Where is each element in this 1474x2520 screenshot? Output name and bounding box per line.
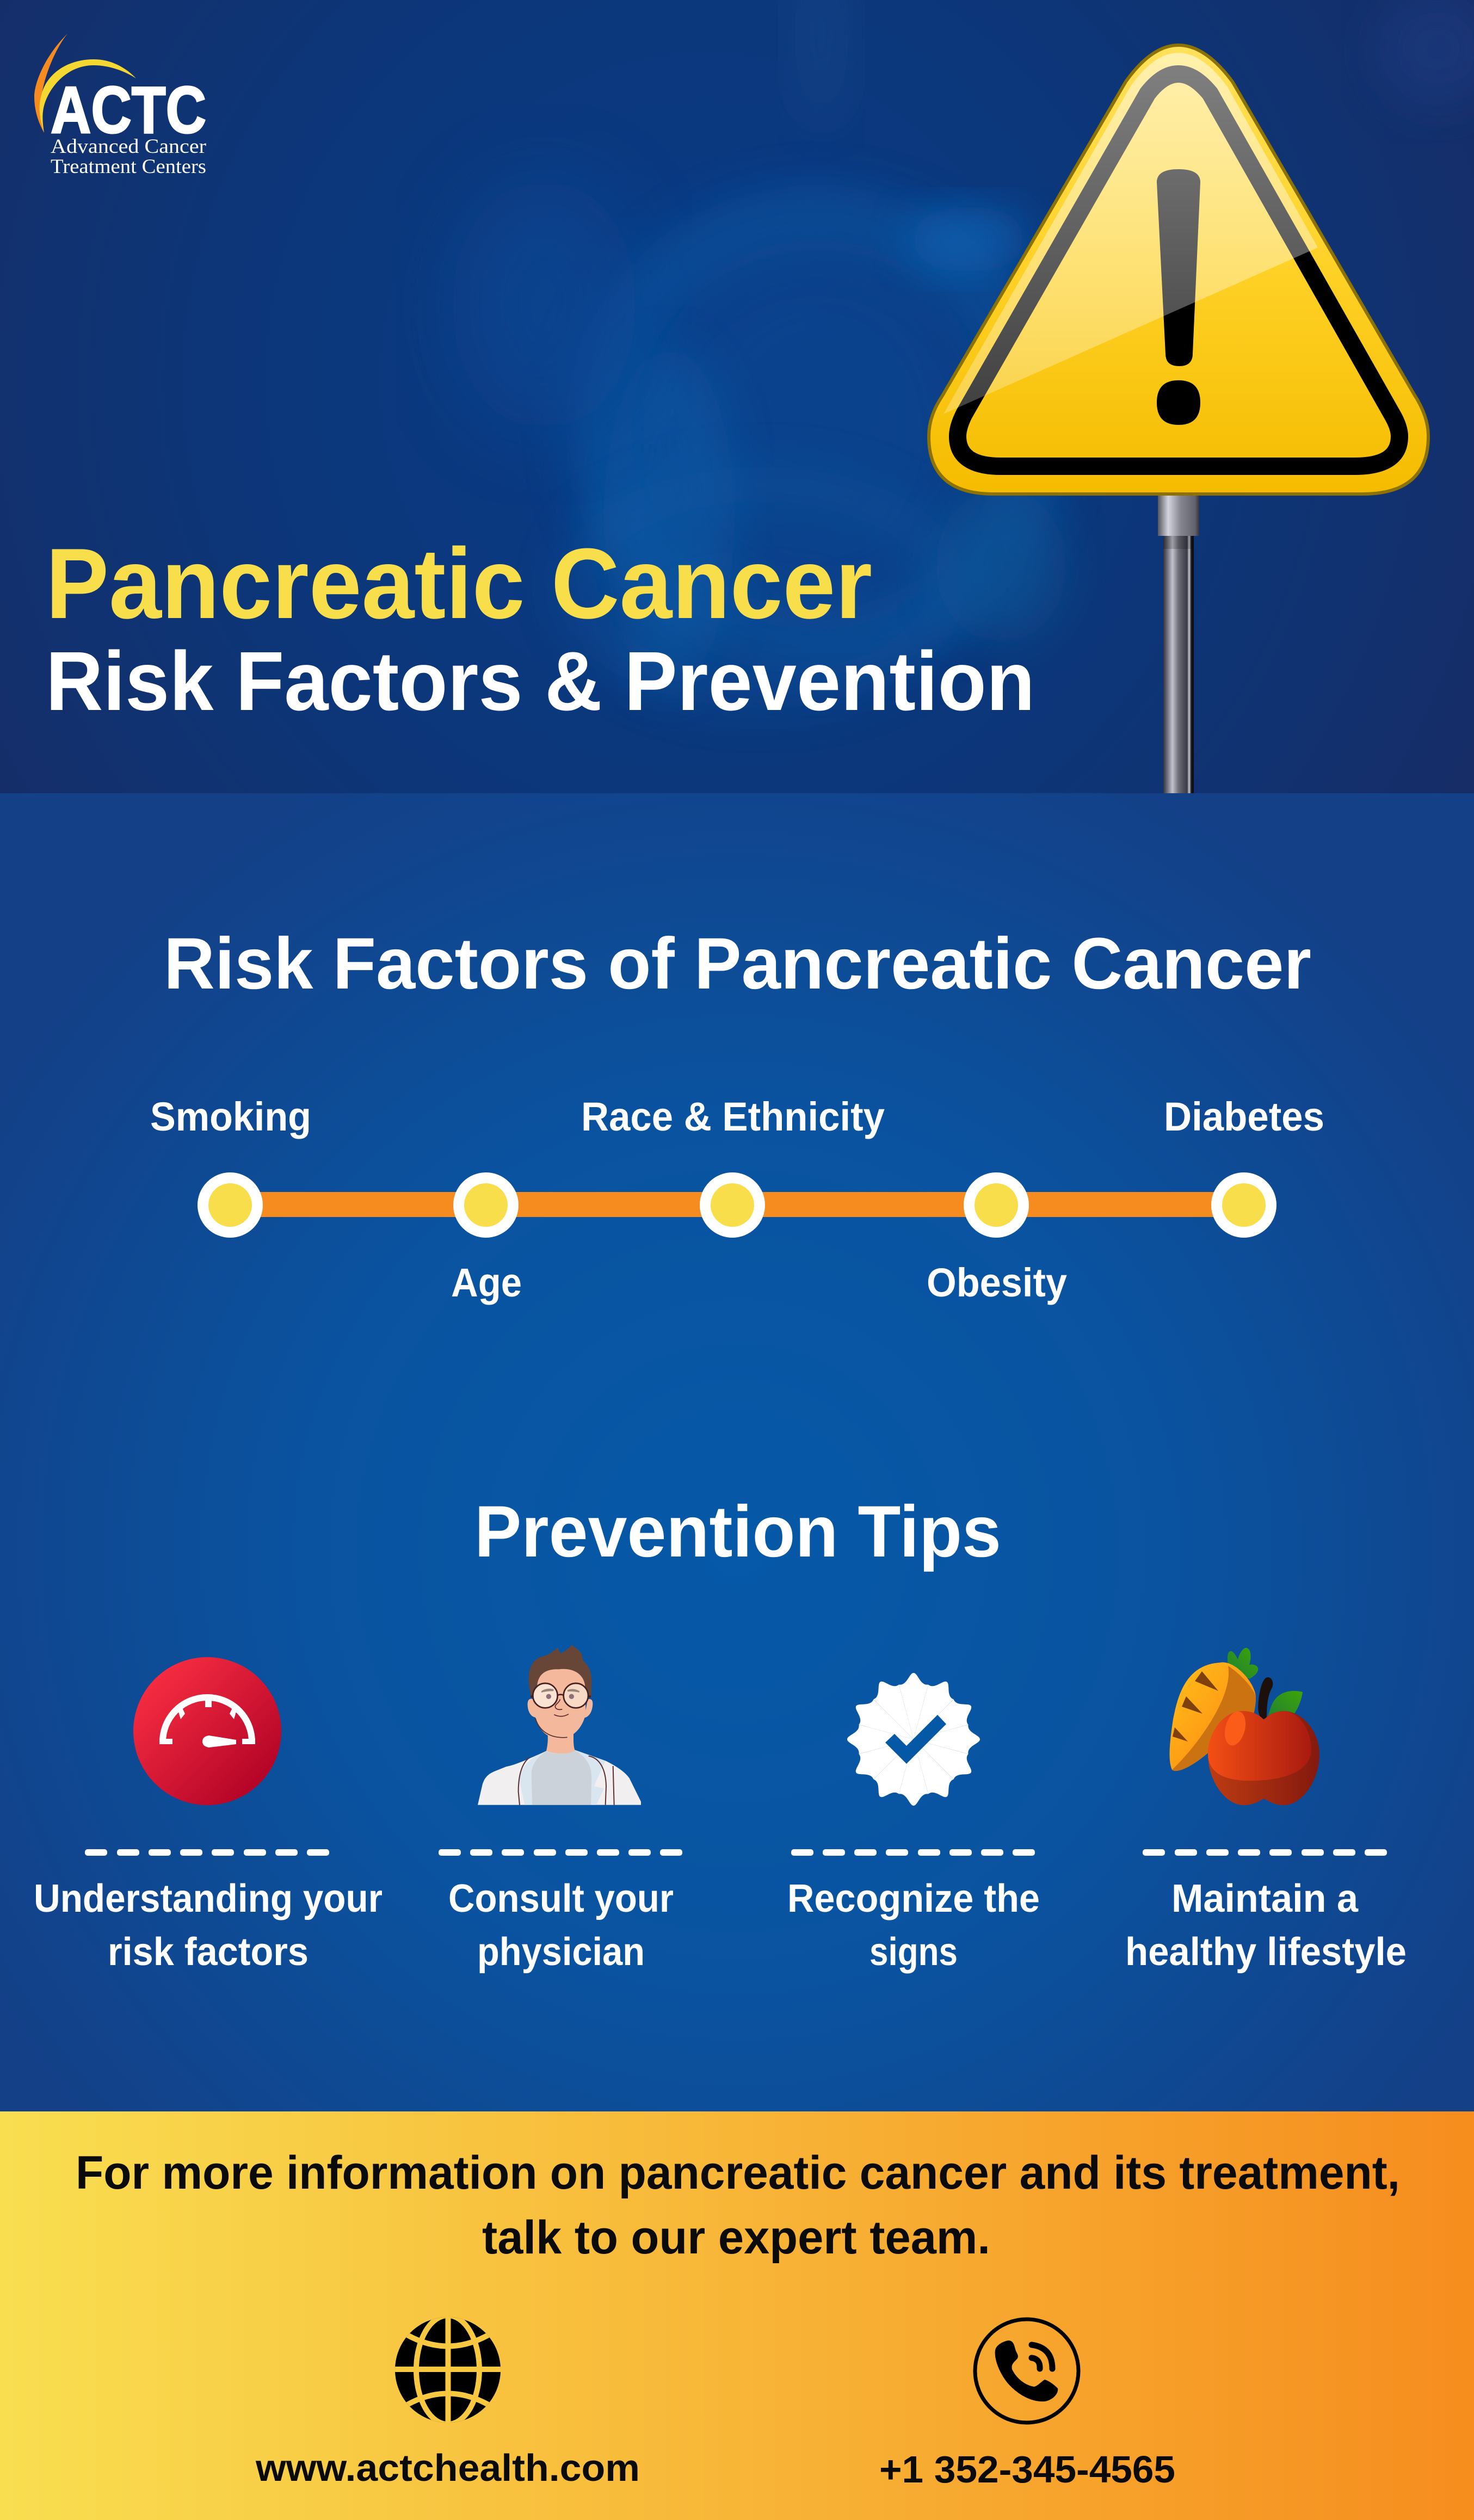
icon: warning triangle bbox=[929, 45, 1428, 494]
footer message bbox=[76, 2147, 1400, 2264]
node: race and ethnicity bbox=[581, 1094, 885, 1232]
tip label: Maintain a bbox=[1171, 1877, 1359, 1920]
tip label: Understanding your bbox=[34, 1877, 383, 1920]
panel: header bbox=[0, 0, 1474, 793]
icon: warning sign post bbox=[1158, 494, 1199, 793]
icon: verified badge bbox=[847, 1673, 980, 1806]
icon: globe bbox=[395, 2317, 501, 2423]
divider dashes bbox=[85, 1849, 329, 1856]
icon: logo swoosh bbox=[34, 34, 136, 133]
footer message: talk to our expert team. bbox=[482, 2212, 990, 2264]
tip: consult your physician bbox=[439, 1645, 682, 1974]
tip label: physician bbox=[477, 1930, 645, 1974]
tip label: healthy lifestyle bbox=[1125, 1930, 1407, 1974]
heading: prevention tips: Prevention Tips bbox=[474, 1491, 1001, 1572]
contact: website: www.actchealth.com bbox=[255, 2447, 640, 2489]
title: Pancreatic Cancer bbox=[46, 527, 872, 639]
logo wordmark: ACTC bbox=[51, 73, 206, 147]
logo subtitle: Treatment Centers bbox=[51, 156, 206, 178]
tip label: Consult your bbox=[448, 1877, 674, 1920]
node: age: Age bbox=[451, 1260, 522, 1305]
icon: phone bbox=[975, 2319, 1078, 2423]
icon: gauge bbox=[133, 1657, 281, 1805]
divider dashes bbox=[791, 1849, 1035, 1856]
tip: maintain a healthy lifestyle bbox=[1125, 1648, 1407, 1974]
tip label: risk factors bbox=[108, 1930, 309, 1974]
node: age bbox=[451, 1178, 522, 1305]
divider dashes bbox=[439, 1849, 682, 1856]
tip label bbox=[34, 1877, 383, 1974]
node: obesity bbox=[927, 1178, 1067, 1305]
tip: understanding your risk factors bbox=[34, 1657, 383, 1974]
node: diabetes: Diabetes bbox=[1164, 1094, 1324, 1139]
tip: recognize the signs bbox=[787, 1673, 1040, 1974]
logo: ACTC bbox=[34, 34, 206, 178]
title: Risk Factors & Prevention bbox=[46, 634, 1035, 728]
footer message: For more information on pancreatic cancer and its treatment, bbox=[76, 2147, 1400, 2199]
node: race and ethnicity: Race & Ethnicity bbox=[581, 1094, 885, 1139]
icon: doctor bbox=[478, 1645, 641, 1805]
logo subtitle bbox=[51, 135, 206, 178]
tip label: Recognize the bbox=[787, 1877, 1040, 1920]
tip label bbox=[448, 1877, 674, 1974]
node: smoking bbox=[150, 1094, 311, 1232]
node: smoking: Smoking bbox=[150, 1094, 311, 1139]
tip label bbox=[787, 1877, 1040, 1974]
title bbox=[46, 527, 1035, 728]
node: obesity: Obesity bbox=[927, 1260, 1067, 1305]
node: diabetes bbox=[1164, 1094, 1324, 1232]
tip label: signs bbox=[869, 1930, 958, 1974]
sign gloss highlight bbox=[943, 53, 1318, 414]
logo subtitle: Advanced Cancer bbox=[51, 135, 206, 158]
tip label bbox=[1125, 1877, 1407, 1974]
heading: risk factors: Risk Factors of Pancreatic Cancer bbox=[164, 923, 1311, 1004]
panel: main content bbox=[0, 793, 1474, 2111]
panel: footer bbox=[0, 2111, 1474, 2520]
icon: carrot and apple bbox=[1170, 1648, 1319, 1805]
contact: phone number: +1 352-345-4565 bbox=[879, 2448, 1175, 2491]
timeline: risk factors bbox=[150, 1094, 1324, 1305]
divider dashes bbox=[1143, 1849, 1387, 1856]
